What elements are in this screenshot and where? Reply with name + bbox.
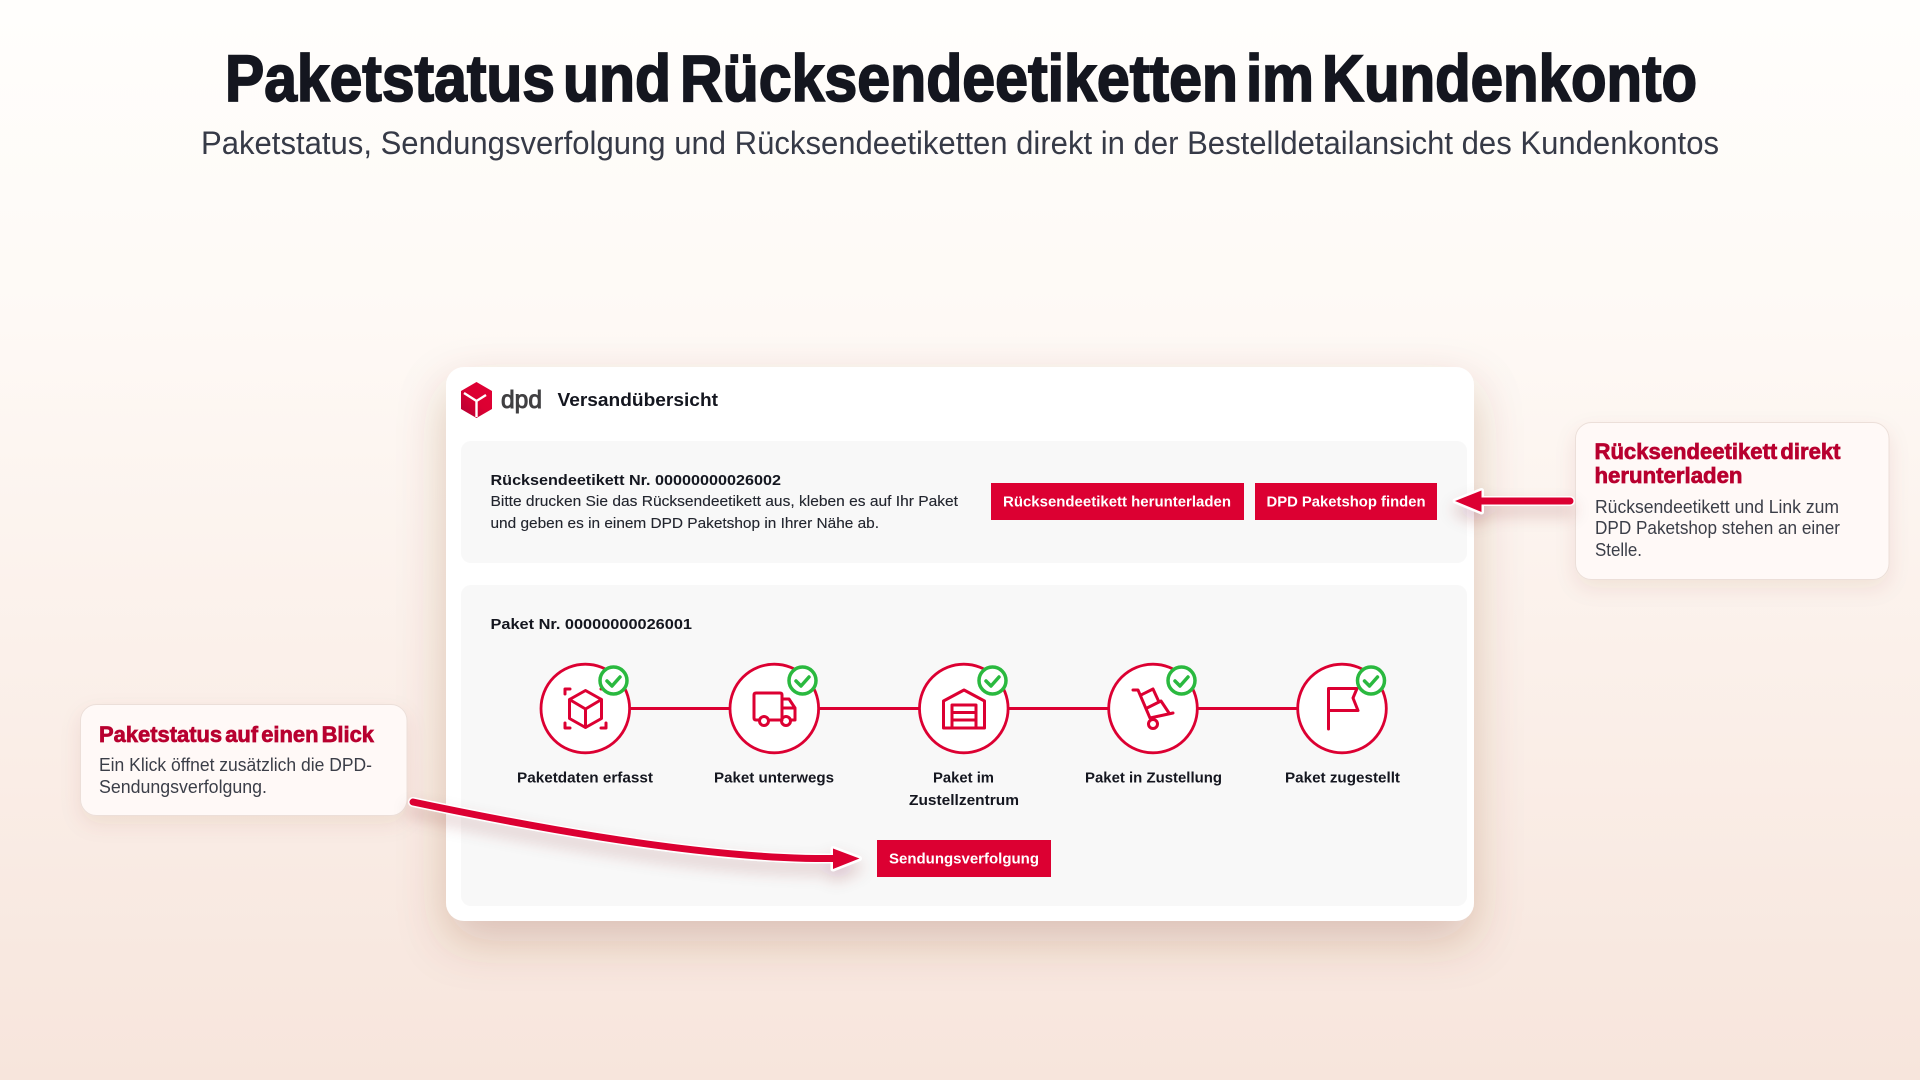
subtitle: Paketstatus, Sendungsverfolgung und Rücksendeetiketten direkt in der Bestelldetailansicht des Kundenkontos xyxy=(201,125,1719,161)
icon: dpd logo xyxy=(461,382,542,418)
button: Sendungsverfolgung: Sendungsverfolgung xyxy=(889,850,1039,868)
step: Paket zugestellt: Paket zugestellt xyxy=(1285,770,1400,786)
button: Sendungsverfolgung xyxy=(877,840,1051,877)
title: und xyxy=(563,41,671,115)
panel: Versandübersicht card xyxy=(446,367,1474,921)
callout: Paketstatus auf einen Blick: Paketstatus auf einen Blick xyxy=(99,722,375,747)
step: Paket unterwegs xyxy=(714,664,834,786)
callout: Paketstatus auf einen Blick: Sendungsverfolgung. xyxy=(99,777,267,797)
button: find DPD Paketshop: DPD Paketshop finden xyxy=(1266,494,1426,510)
callout: Rücksendeetikett direkt herunterladen: herunterladen xyxy=(1594,463,1742,488)
button: download return label: Rücksendeetikett herunterladen xyxy=(1003,494,1231,510)
text: return label number: Rücksendeetikett Nr. 00000000026002 xyxy=(490,472,781,489)
callout: Rücksendeetikett direkt herunterladen: Stelle. xyxy=(1595,540,1642,560)
arrow: to return label buttons xyxy=(1455,490,1570,512)
title xyxy=(225,41,1697,115)
callout: Rücksendeetikett direkt herunterladen xyxy=(1576,422,1889,580)
step: Paket im Zustellzentrum: Zustellzentrum xyxy=(909,792,1019,809)
step: Paket in Zustellung xyxy=(1085,664,1222,786)
callout: Paketstatus auf einen Blick: Ein Klick öffnet zusätzlich die DPD- xyxy=(99,755,372,775)
button: find DPD Paketshop xyxy=(1255,483,1437,520)
step: Paketdaten erfasst: Paketdaten erfasst xyxy=(517,770,653,786)
title: Kundenkonto xyxy=(1322,41,1697,115)
text: return label instructions: Bitte drucken Sie das Rücksendeetikett aus, kleben es auf Ihr Paket xyxy=(490,493,959,510)
text: package number: Paket Nr. 00000000026001 xyxy=(490,616,692,633)
title: Paketstatus xyxy=(225,41,555,115)
step: Paket im Zustellzentrum xyxy=(909,664,1019,809)
title: Rücksendeetiketten xyxy=(680,41,1238,115)
text: return label instructions: und geben es in einem DPD Paketshop in Ihrer Nähe ab. xyxy=(490,515,879,532)
step: Paket im Zustellzentrum: Paket im xyxy=(933,770,994,786)
arrow: to Sendungsverfolgung button xyxy=(413,802,860,869)
callout: Rücksendeetikett direkt herunterladen: Rücksendeetikett und Link zum xyxy=(1595,497,1839,517)
step: Paketdaten erfasst xyxy=(517,664,653,786)
callout: Rücksendeetikett direkt herunterladen: DPD Paketshop stehen an einer xyxy=(1595,518,1840,538)
status connector line xyxy=(585,707,1342,710)
panel: return label xyxy=(461,441,1467,563)
heading: Versandübersicht: Versandübersicht xyxy=(558,389,718,410)
text: return label instructions xyxy=(490,493,959,532)
button: download return label xyxy=(991,483,1244,520)
callout: Paketstatus auf einen Blick xyxy=(80,704,407,816)
step: Paket in Zustellung: Paket in Zustellung xyxy=(1085,770,1222,786)
callout: Rücksendeetikett direkt herunterladen: Rücksendeetikett direkt xyxy=(1594,439,1841,464)
step: Paket zugestellt xyxy=(1285,664,1400,786)
panel: package status xyxy=(461,585,1467,906)
step: Paket unterwegs: Paket unterwegs xyxy=(714,770,834,786)
icon: dpd logo: dpd xyxy=(501,386,542,414)
title: im xyxy=(1246,41,1314,115)
